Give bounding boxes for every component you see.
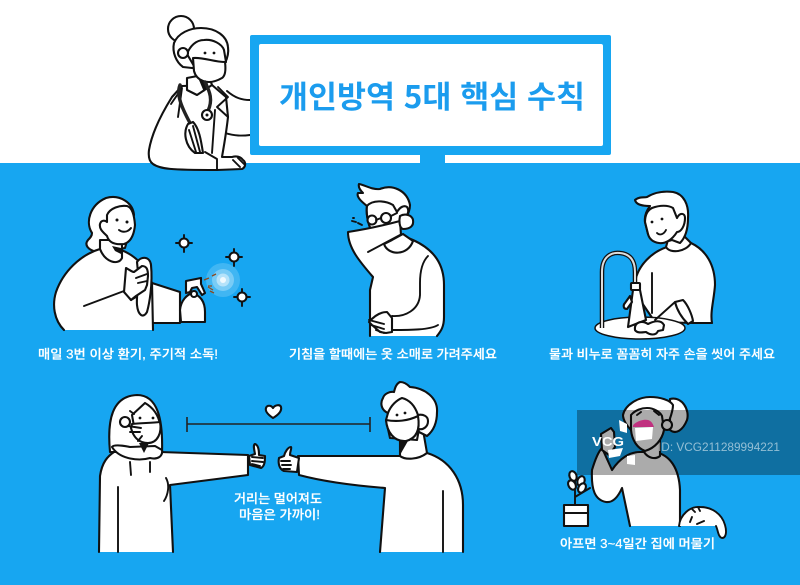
caption: distance but close at heart	[234, 492, 322, 522]
illustration: man giving thumbs up with mask	[279, 382, 463, 552]
caption: ventilation: 매일 3번 이상 환기, 주기적 소독!	[38, 346, 218, 362]
watermark fragments	[608, 420, 654, 465]
caption: cough etiquette: 기침을 할때에는 옷 소매로 가려주세요	[289, 346, 497, 362]
title text: 개인방역 5대 핵심 수칙	[279, 72, 585, 117]
illustration: doctor with mask	[149, 16, 250, 170]
blue background panel	[0, 163, 800, 585]
caption: distance but close at heart: 마음은 가까이!	[239, 508, 320, 522]
caption: distance but close at heart: 거리는 멀어져도	[234, 492, 322, 506]
illustration: man washing hands at sink	[595, 192, 715, 339]
caption: stay home when sick: 아프면 3~4일간 집에 머물기	[560, 537, 715, 551]
icon: heart	[266, 405, 281, 418]
illustration: woman disinfecting with spray	[54, 197, 250, 330]
illustration: man coughing into sleeve	[348, 184, 444, 336]
illustration: sick woman at home with phone, plant and cat	[564, 397, 726, 538]
watermark band	[577, 410, 800, 475]
watermark id text: ID: VCG211289994221	[658, 440, 780, 454]
distance line with ticks	[187, 417, 370, 432]
watermark logo text: VCG	[592, 434, 624, 449]
caption: hand washing: 물과 비누로 꼼꼼히 자주 손을 씻어 주세요	[549, 348, 775, 362]
illustration: woman giving thumbs up with mask	[99, 395, 265, 552]
title banner	[250, 35, 611, 164]
